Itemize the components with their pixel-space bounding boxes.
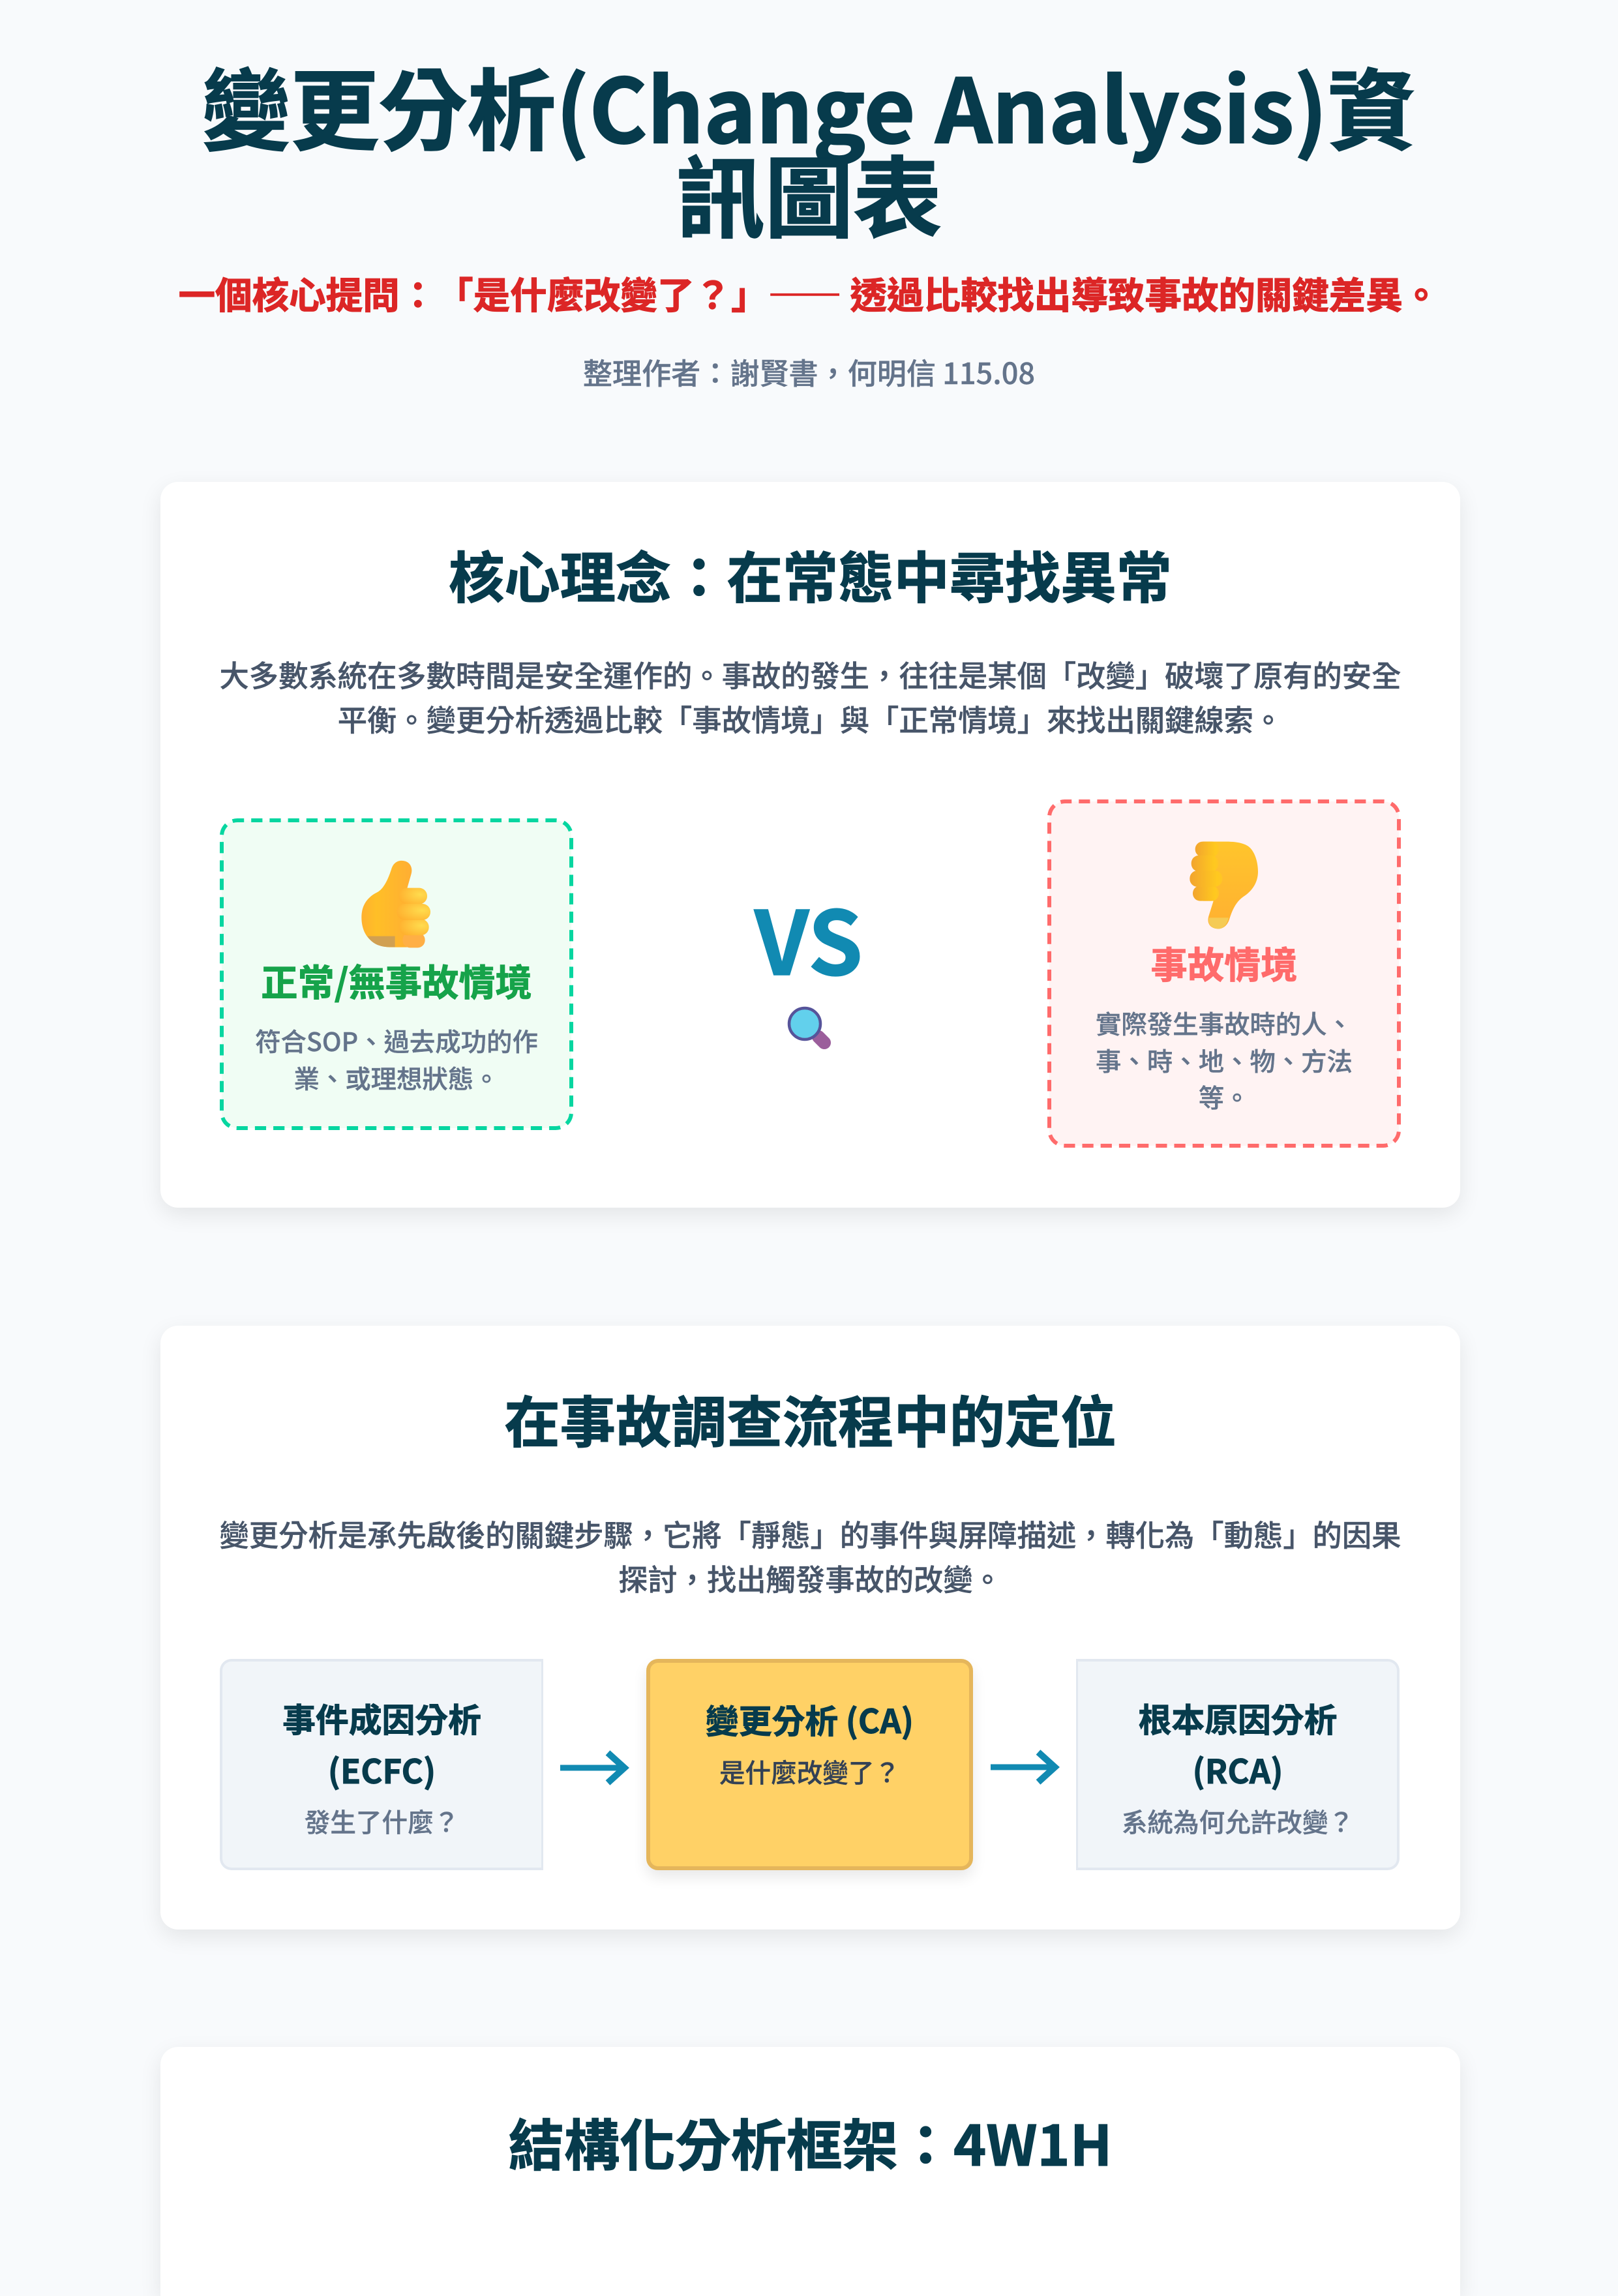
- label: normal situation: 正常/無事故情境: [261, 954, 532, 1007]
- icon: magnifying glass: [788, 1007, 831, 1049]
- text: normal situation description: 業、或理想狀態。: [293, 1059, 500, 1096]
- panel background: [160, 482, 1460, 1208]
- panel background: [160, 1326, 1460, 1930]
- text: ECFC title: 事件成因分析: [282, 1693, 481, 1742]
- text: incident situation description: [1096, 1004, 1353, 1115]
- text: normal situation description: 符合SOP、過去成功的作: [255, 1022, 538, 1059]
- heading: 4W1H: 結構化分析框架：4W1H: [509, 2101, 1112, 2182]
- box: ECFC: [220, 1659, 543, 1870]
- text: RCA title: 根本原因分析: [1139, 1693, 1337, 1742]
- title: 變更分析(Change Analysis)資: [202, 41, 1416, 169]
- header: [179, 41, 1439, 393]
- text: concept description: [220, 653, 1401, 739]
- author line: 整理作者：謝賢書，何明信 115.08: [583, 350, 1035, 393]
- panel: 4W1H framework: [158, 2069, 1463, 2293]
- text: position description: 變更分析是承先啟後的關鍵步驟，它將「靜態」的事件與屏障描述，轉化為「動態」的因果: [220, 1512, 1401, 1555]
- text: position description: 探討，找出觸發事故的改變。: [618, 1556, 1002, 1599]
- text: incident situation description: 事、時、地、物、方法: [1096, 1041, 1353, 1079]
- label: incident situation: 事故情境: [1150, 936, 1298, 989]
- arrow: ECFC to CA: [560, 1750, 629, 1785]
- title: 訊圖表: [676, 128, 942, 256]
- panel: position in investigation flow: [158, 1348, 1463, 1939]
- heading: core concept: 核心理念：在常態中尋找異常: [449, 533, 1172, 614]
- text: ECFC subtitle: 發生了什麼？: [305, 1802, 459, 1840]
- text: normal situation description: [255, 1022, 538, 1096]
- panel background: [160, 2047, 1460, 2296]
- text: RCA title: [1139, 1693, 1337, 1793]
- text: ECFC title: (ECFC): [328, 1745, 436, 1793]
- text: incident situation description: 實際發生事故時的人、: [1096, 1004, 1353, 1041]
- text: concept description: 大多數系統在多數時間是安全運作的。事故的發生，往往是某個「改變」破壞了原有的安全: [220, 653, 1401, 696]
- icon: thumbs down: [1190, 841, 1258, 929]
- label: VS: VS: [755, 872, 863, 1000]
- panel: core concept: [158, 504, 1463, 1217]
- text: RCA subtitle: 系統為何允許改變？: [1122, 1802, 1354, 1840]
- heading: position: 在事故調查流程中的定位: [504, 1378, 1116, 1459]
- text: concept description: 平衡。變更分析透過比較「事故情境」與「正常情境」來找出關鍵線索。: [338, 696, 1283, 739]
- box: incident situation: [1047, 799, 1401, 1148]
- box: CA highlighted: [646, 1659, 973, 1870]
- text: RCA title: (RCA): [1193, 1745, 1283, 1793]
- icon: thumbs up: [361, 861, 430, 948]
- text: ECFC title: [282, 1693, 481, 1793]
- text: CA title: 變更分析 (CA): [706, 1695, 914, 1743]
- text: incident situation description: 等。: [1199, 1078, 1250, 1115]
- subtitle: 一個核心提問：「是什麼改變了？」—— 透過比較找出導致事故的關鍵差異。: [179, 266, 1439, 320]
- arrow: CA to RCA: [991, 1750, 1060, 1785]
- box: normal situation: [220, 818, 573, 1130]
- text: CA subtitle: 是什麼改變了？: [719, 1753, 900, 1790]
- box: RCA: [1076, 1659, 1400, 1870]
- title: [202, 41, 1416, 256]
- text: position description: [220, 1512, 1401, 1599]
